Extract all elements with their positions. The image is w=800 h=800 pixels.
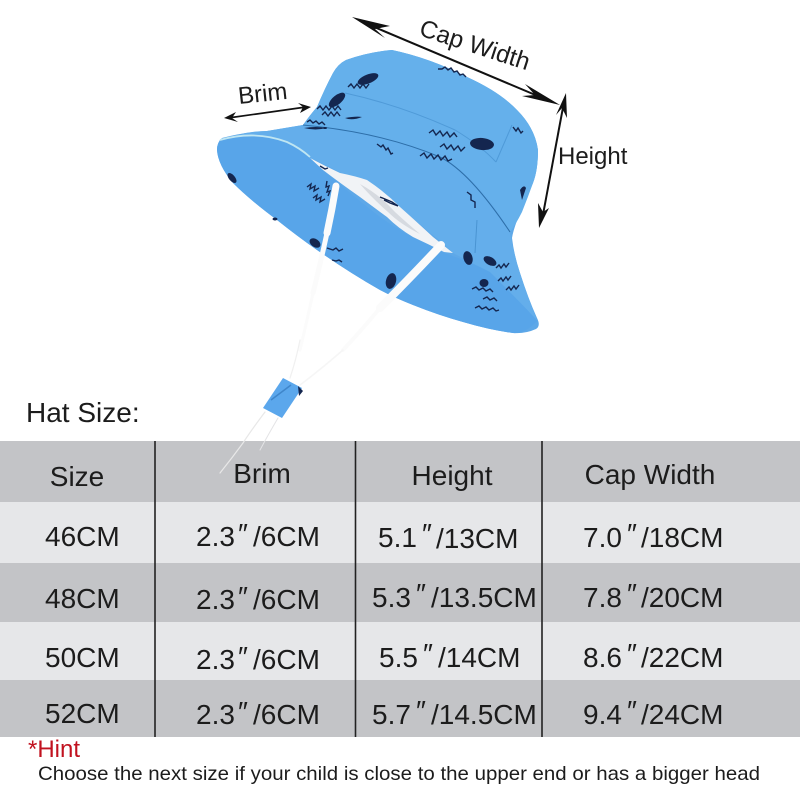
row 52CM: ″ [238,696,248,727]
row 50CM: 50CM [45,642,120,673]
row 48CM: 2.3 [196,584,235,615]
row 48CM: /13.5CM [431,582,537,613]
table header row: Brim [233,458,291,489]
table header row: Size [50,461,104,492]
row 48CM: /20CM [641,582,723,613]
row 52CM: /14.5CM [431,699,537,730]
strap toggle [263,378,303,418]
row 46CM: /6CM [253,521,320,552]
row 46CM [45,518,723,554]
row 52CM: 2.3 [196,699,235,730]
heading: Hat Size: Hat Size: [26,397,140,428]
arrow: brim [224,103,311,122]
hat crown lighter panel [303,50,538,232]
label: Cap Width: Cap Width [416,15,533,76]
row 50CM: /6CM [253,644,320,675]
row 46CM: ″ [238,518,248,549]
brim front fold [222,125,537,320]
row 48CM: 48CM [45,583,120,614]
dark shark prints [226,71,526,290]
row 50CM: /22CM [641,642,723,673]
row 48CM: ″ [627,578,637,609]
table row bands [0,441,800,737]
row 52CM: 52CM [45,698,120,729]
zigzag wave marks [307,67,523,311]
table header row: Cap Width [585,459,715,490]
table column dividers [155,441,542,737]
row 52CM: 9.4 [583,699,622,730]
row 48CM: ″ [238,581,248,612]
lining shadow [360,184,420,234]
row 50CM: /14CM [438,642,520,673]
hat photo illustration [217,50,539,473]
row 46CM: /13CM [436,523,518,554]
table header row: Height [412,460,493,491]
row 48CM [45,578,723,615]
label: Brim: Brim [237,78,289,110]
row 48CM: /6CM [253,584,320,615]
white hat lining [310,158,453,253]
row 50CM: 8.6 [583,642,622,673]
seam lines [303,93,512,253]
row 48CM: 5.3 [372,582,411,613]
row 52CM: ″ [416,695,426,726]
row 50CM: ″ [627,638,637,669]
row 46CM: 7.0 [583,522,622,553]
row 46CM: 2.3 [196,521,235,552]
row 46CM: 5.1 [378,522,417,553]
row 46CM: ″ [627,518,637,549]
row 48CM: 7.8 [583,582,622,613]
row 52CM: /6CM [253,699,320,730]
table: hat size chart [0,441,800,737]
row 46CM: /18CM [641,522,723,553]
row 52CM [45,695,723,730]
row 52CM: 5.7 [372,699,411,730]
hat brim and crown silhouette [217,50,539,333]
row 48CM: ″ [416,578,426,609]
row 52CM: /24CM [641,699,723,730]
row 46CM: 46CM [45,521,120,552]
arrow: height [538,93,567,228]
row 50CM: 2.3 [196,644,235,675]
white chin straps [220,186,441,473]
table header row [50,458,715,492]
row 50CM: ″ [238,641,248,672]
arrow: cap width [352,17,560,105]
brim underside [217,136,537,333]
hint label: *Hint [28,736,80,763]
row 50CM: ″ [423,638,433,669]
row 52CM: ″ [627,695,637,726]
row 50CM: 5.5 [379,642,418,673]
row 50CM [45,638,723,675]
brim edge highlight [220,135,310,157]
label: Height: Height [558,143,628,170]
row 46CM: ″ [422,518,432,549]
hint text: Choose the next size if your child is close to the upper end or has a bigger head [38,763,760,785]
